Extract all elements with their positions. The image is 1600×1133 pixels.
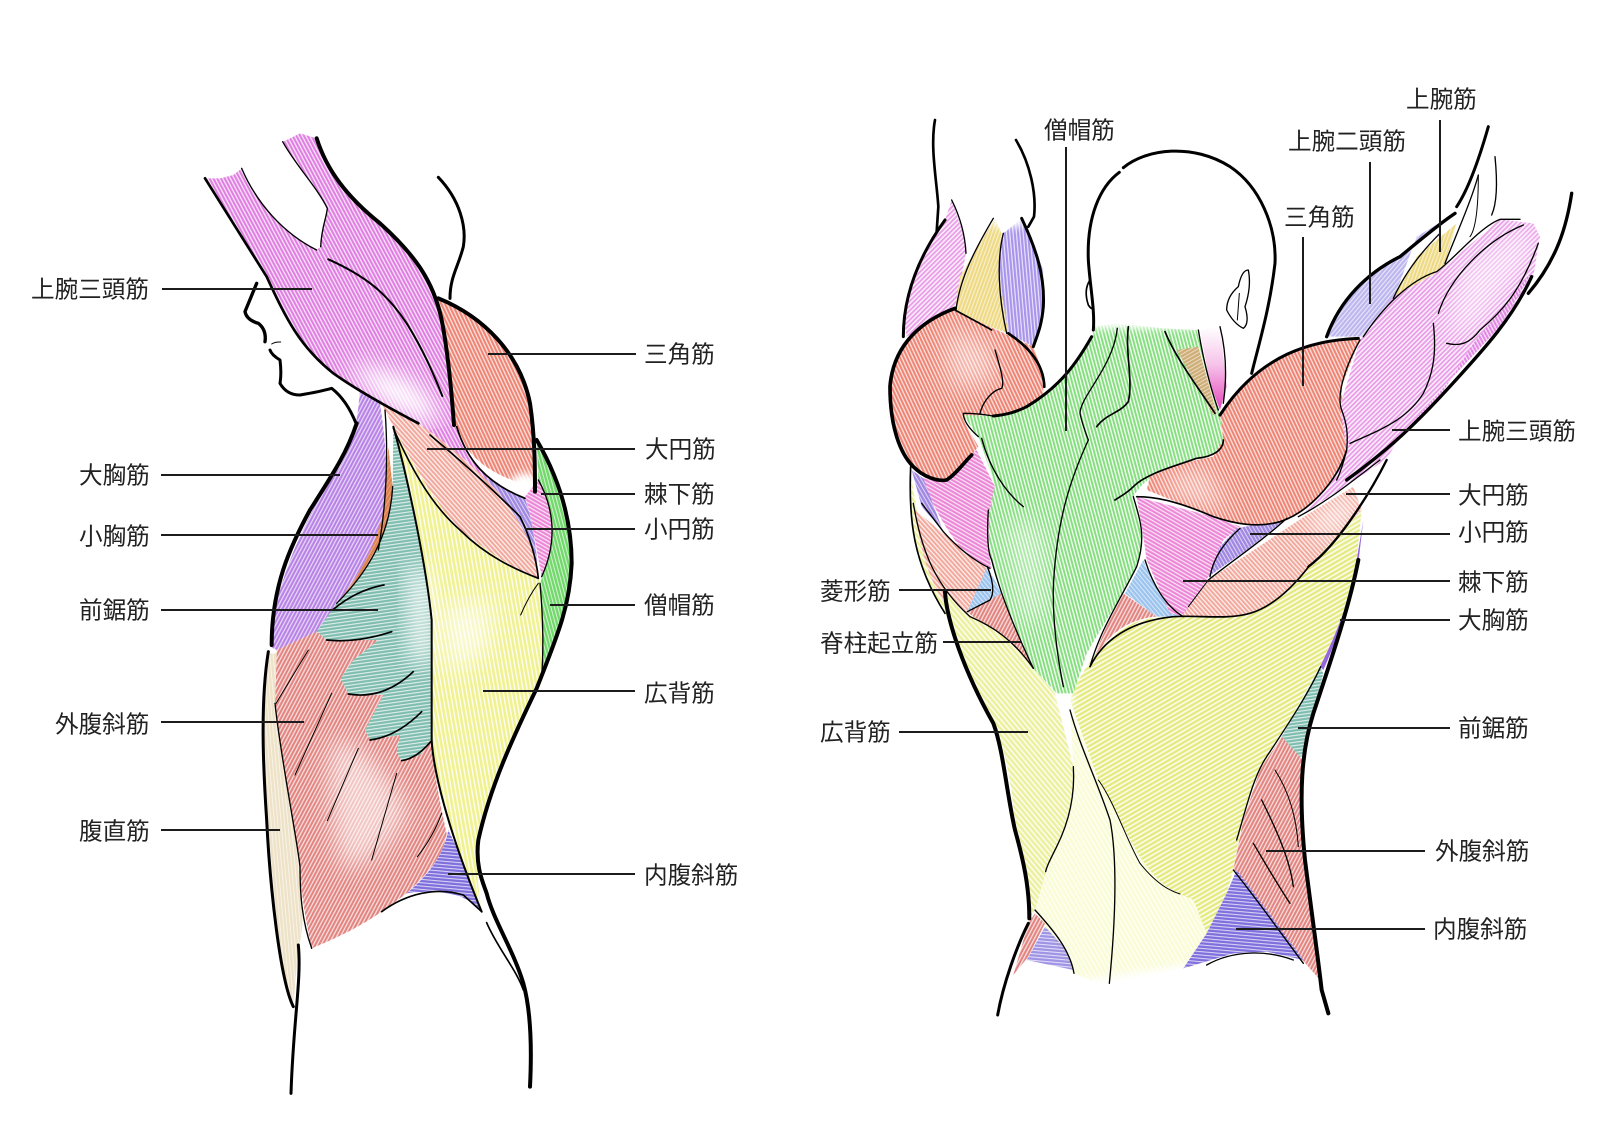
muscle: erector spinae left, back view	[967, 593, 1034, 670]
muscle: erector spinae right, back view	[1091, 593, 1157, 667]
figure: side view	[205, 133, 572, 1093]
highlight: trapezius fade	[1007, 520, 1043, 620]
muscle: neck brown, back view	[1177, 347, 1217, 415]
muscle: lower oblique left violet, back view	[1027, 927, 1073, 970]
label: 大胸筋 left: 大胸筋	[79, 462, 150, 490]
muscle: trapezius, back view	[963, 323, 1223, 693]
muscle: teres major right, back view	[1182, 487, 1362, 617]
label: 棘下筋 right: 棘下筋	[1458, 570, 1529, 596]
muscle: triceps right, back view	[1298, 219, 1540, 517]
highlight: deltoid right fade	[1157, 467, 1227, 513]
muscle: deltoid left, back view	[890, 310, 1043, 480]
highlight: deltoid end fade	[510, 473, 540, 497]
muscle: biceps right, back view	[1327, 213, 1455, 337]
muscle: deltoid, side view	[438, 298, 535, 492]
muscle: lower oblique left red, back view	[1013, 913, 1045, 975]
label: 大胸筋 right: 大胸筋	[1458, 608, 1529, 634]
muscle: pectoralis minor, side view	[337, 447, 393, 603]
muscle: teres minor, side view	[483, 477, 537, 563]
highlight: deltoid left	[947, 327, 993, 387]
label: 内腹斜筋 right: 内腹斜筋	[1433, 916, 1527, 944]
label: 外腹斜筋 left: 外腹斜筋	[55, 712, 149, 738]
label: 広背筋 right: 広背筋	[820, 720, 891, 746]
label: 僧帽筋 left: 僧帽筋	[644, 592, 715, 620]
muscle: pectoralis strip, back view	[1320, 520, 1363, 670]
label: 広背筋 left: 広背筋	[644, 680, 715, 708]
highlight: neck fade	[1090, 315, 1200, 328]
label: 上腕二頭筋 right: 上腕二頭筋	[1288, 128, 1406, 156]
muscle: external oblique, side view	[275, 632, 447, 948]
labels: back view	[820, 86, 1576, 944]
highlight: serratus fade	[410, 560, 430, 667]
labels: side view	[31, 276, 738, 890]
muscle: trapezius, side view	[537, 440, 572, 677]
label: 僧帽筋 right: 僧帽筋	[1044, 118, 1115, 144]
muscle: deltoid right, back view	[1147, 338, 1360, 525]
label: 上腕三頭筋 left: 上腕三頭筋	[31, 276, 149, 304]
muscle: serratus anterior, side view	[317, 427, 432, 761]
muscle: external oblique, back view	[1233, 737, 1320, 980]
label: 外腹斜筋 right: 外腹斜筋	[1435, 838, 1529, 866]
highlight: triceps elbow fade	[347, 367, 440, 423]
muscle: pectoralis major, side view	[270, 390, 386, 650]
label: 大円筋 right: 大円筋	[1458, 482, 1529, 510]
muscle: latissimus left, back view	[935, 560, 1074, 918]
muscle: biceps left, back view	[998, 218, 1043, 347]
muscle: lat left upper, back view	[910, 473, 962, 640]
muscle: infraspinatus left, back view	[923, 450, 995, 568]
muscle: teres left, back view	[915, 510, 990, 617]
label: 三角筋 left: 三角筋	[644, 342, 715, 368]
muscle: internal oblique, side view	[407, 830, 482, 912]
muscle: teres major, side view	[382, 403, 538, 578]
label: 小円筋 left: 小円筋	[644, 516, 715, 544]
label: 腹直筋 left: 腹直筋	[79, 818, 150, 846]
highlight: sacral bottom fade	[1067, 963, 1193, 1000]
label: 小円筋 right: 小円筋	[1458, 520, 1529, 546]
muscle: forearm pink, back view	[903, 200, 966, 337]
muscle: infraspinatus, side view	[525, 480, 552, 577]
outlines: side view	[205, 138, 572, 1093]
outlines: back view	[890, 120, 1572, 1015]
figure: back view	[890, 120, 1572, 1015]
label: 前鋸筋 right: 前鋸筋	[1458, 716, 1529, 742]
muscle: triceps right magenta band, back view	[1353, 270, 1533, 473]
label: 小胸筋 left: 小胸筋	[79, 524, 150, 550]
muscle: rhomboid left, back view	[967, 567, 1002, 612]
muscle: brachialis left, back view	[955, 218, 1008, 333]
muscle: internal oblique, back view	[1183, 870, 1303, 968]
label: 上腕筋 right: 上腕筋	[1406, 86, 1477, 114]
label: 脊柱起立筋 right: 脊柱起立筋	[820, 630, 938, 658]
muscle: rhomboid right, back view	[1125, 560, 1180, 617]
label: 上腕三頭筋 right: 上腕三頭筋	[1458, 418, 1576, 446]
label: 前鋸筋 left: 前鋸筋	[79, 598, 150, 624]
muscle: serratus, back view	[1282, 667, 1323, 757]
label: 大円筋 left: 大円筋	[645, 436, 716, 464]
label: 菱形筋 right: 菱形筋	[820, 578, 891, 606]
highlight: teres major right fade	[1310, 490, 1360, 543]
label: 内腹斜筋 left: 内腹斜筋	[644, 862, 738, 890]
highlight: spine junction	[1057, 686, 1073, 710]
outlines: right arm	[1327, 127, 1572, 480]
muscle: teres minor left, back view	[912, 470, 943, 532]
muscle: infraspinatus right, back view	[1137, 497, 1240, 617]
muscle: brachialis right, back view	[1393, 223, 1457, 297]
muscle: triceps, side view	[205, 133, 487, 483]
label: 棘下筋 left: 棘下筋	[644, 482, 715, 508]
label: 三角筋 right: 三角筋	[1284, 204, 1355, 232]
muscle: teres minor right, back view	[1208, 518, 1287, 577]
highlight: triceps right fade	[1447, 223, 1533, 340]
highlight: external oblique fade	[330, 740, 407, 870]
highlight: arm top fade	[990, 213, 1023, 227]
muscle: neck magenta, back view	[1200, 327, 1227, 410]
highlight: latissimus fade	[440, 603, 493, 673]
muscle: latissimus right large, back view	[1070, 510, 1362, 933]
muscle: rectus abdominis, side view	[264, 653, 303, 1007]
muscle: sacral aponeurosis, back view	[1035, 707, 1207, 987]
muscle: triceps tail, side view	[430, 425, 525, 517]
muscle: latissimus dorsi, side view	[393, 427, 543, 912]
